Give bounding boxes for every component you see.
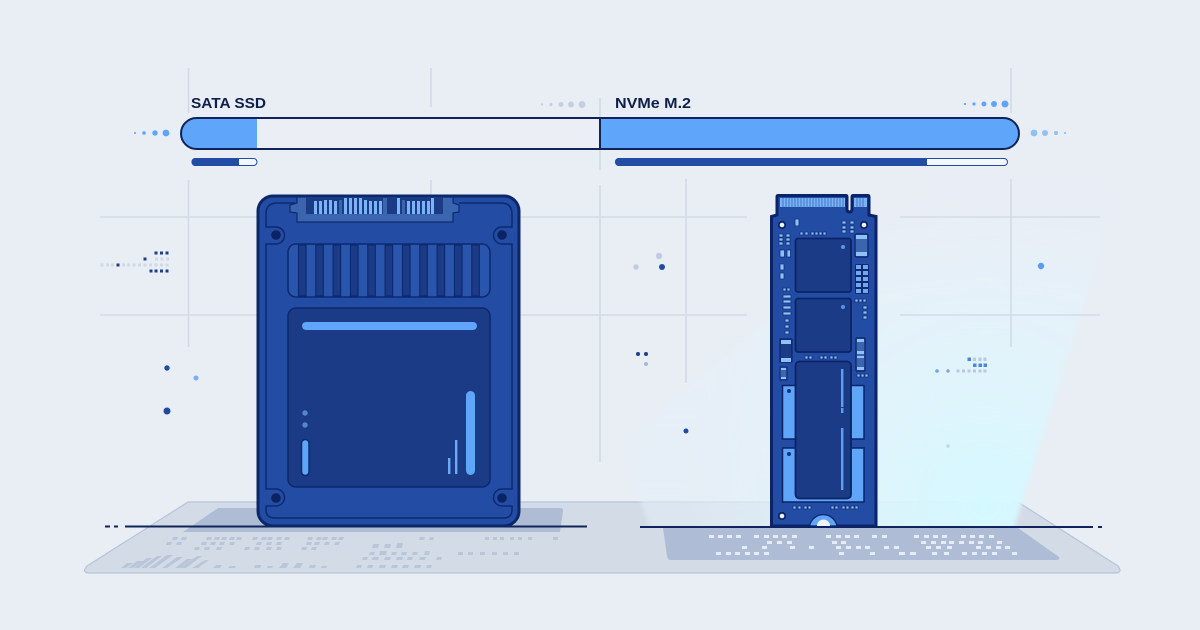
status pill bbox=[302, 440, 309, 476]
NVMe speed fill bbox=[600, 118, 1019, 149]
NVMe floor data marks bbox=[709, 535, 1017, 555]
capacitor right bbox=[856, 338, 865, 371]
memory chip bbox=[796, 298, 851, 352]
label panel bbox=[288, 308, 490, 487]
scattered data dots bbox=[100, 252, 1044, 448]
thin level bars bbox=[448, 440, 457, 474]
NVMe M.2 drive bbox=[772, 196, 876, 526]
light blue NAND blocks bbox=[782, 386, 864, 502]
floor plate bbox=[85, 502, 1120, 573]
tall light bar bbox=[466, 391, 475, 475]
inner outline with screw lobes bbox=[266, 203, 512, 518]
bar outline and divider bbox=[181, 118, 1019, 149]
grid lines bbox=[100, 68, 1100, 462]
speed dots bbox=[134, 100, 1066, 136]
SATA mini progress bar bbox=[192, 158, 257, 166]
NVMe mini progress bar bbox=[615, 158, 1008, 166]
speed bar comparison bbox=[181, 118, 1019, 149]
board outline bbox=[772, 196, 876, 526]
SATA speed fill bbox=[181, 118, 257, 149]
label: NVMe M.2: NVMe M.2 bbox=[615, 96, 691, 112]
edge connector pins bbox=[780, 198, 867, 207]
screw holes bbox=[271, 230, 507, 503]
SATA SSD drive bbox=[258, 196, 519, 526]
resistor grid bbox=[855, 264, 869, 294]
ground lines bbox=[105, 526, 1102, 528]
SATA floor data marks bbox=[121, 537, 558, 568]
SATA drive shadow bbox=[183, 508, 563, 532]
small components bbox=[779, 219, 868, 509]
capacitor left bbox=[780, 339, 792, 362]
mounting holes bbox=[779, 222, 867, 519]
large NAND chip bbox=[796, 362, 851, 498]
drive body bbox=[258, 196, 519, 526]
light beam bbox=[640, 367, 1054, 526]
vent grille bbox=[288, 244, 490, 297]
block dots bbox=[787, 389, 791, 456]
notch arc bbox=[810, 515, 837, 526]
controller chip bbox=[796, 238, 851, 292]
label: SATA SSD: SATA SSD bbox=[191, 96, 266, 112]
top light bar bbox=[302, 322, 477, 330]
small capacitor bbox=[780, 367, 787, 380]
status dots bbox=[302, 410, 308, 428]
NVMe drive shadow bbox=[663, 528, 1059, 560]
capacitor top right bbox=[855, 234, 868, 257]
SATA connector bbox=[290, 197, 459, 222]
